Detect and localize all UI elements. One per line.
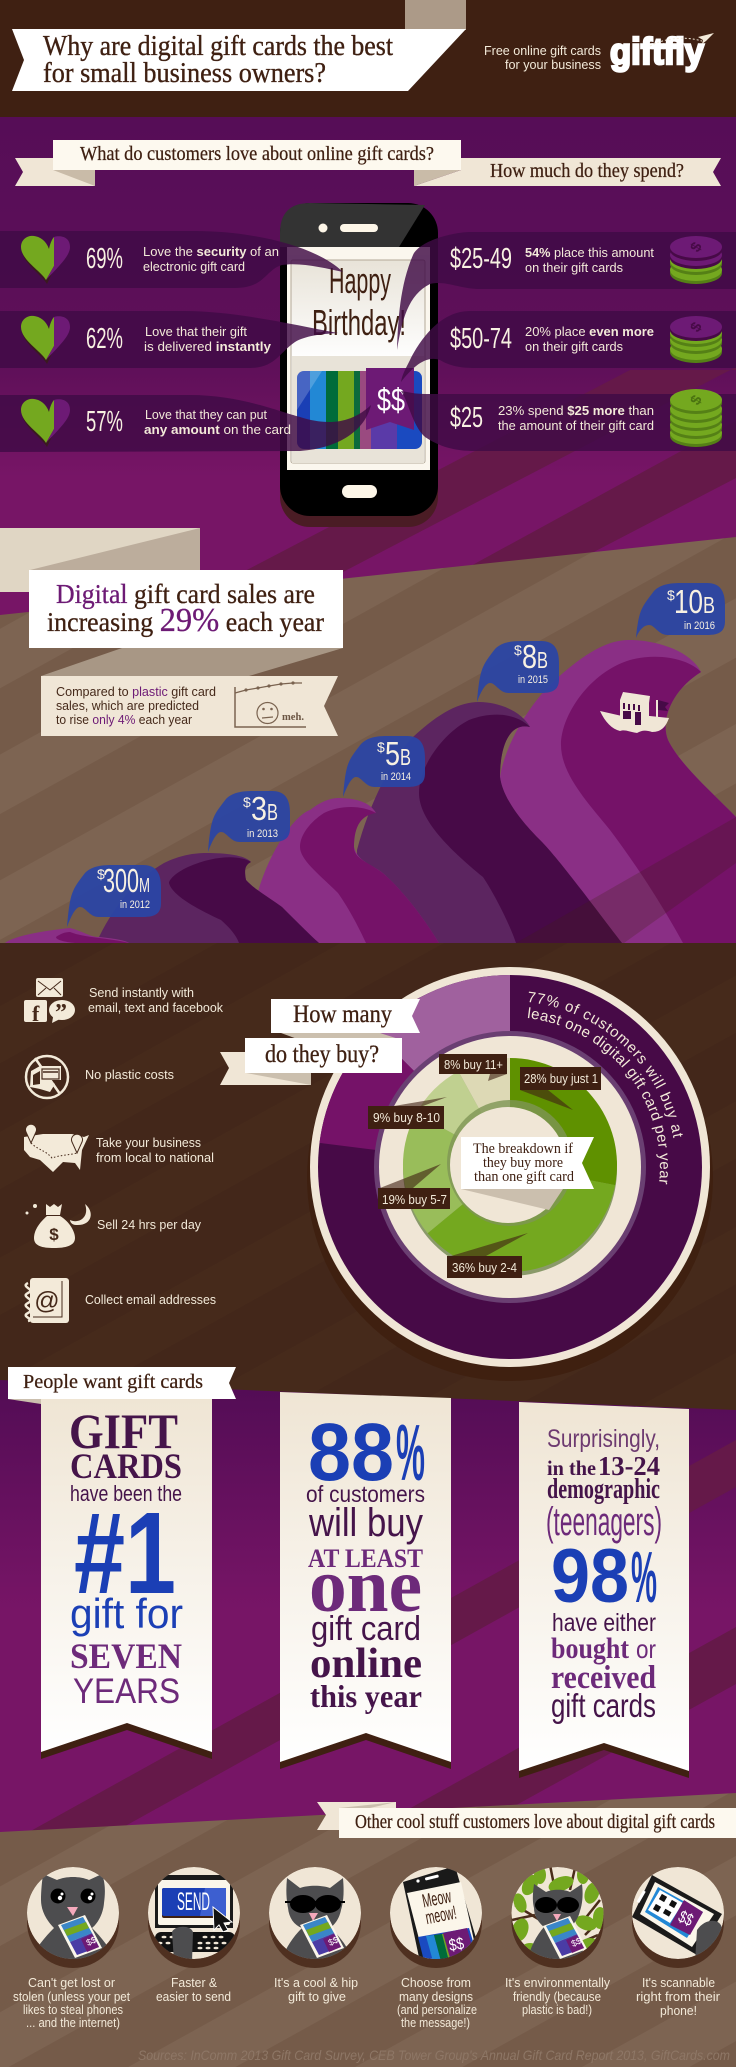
curved heading: least one digital gift card per year [528, 1007, 668, 1184]
icon: money bag at night [26, 1204, 91, 1248]
bubble: 5B in 2014 [343, 735, 425, 797]
tagline: for your business [505, 57, 601, 72]
ribbon heading: how many do they buy: How many [293, 1001, 392, 1028]
segment 36 percent [428, 1165, 615, 1272]
bubble: 8B in 2015: $ [514, 642, 522, 658]
caption 3: It's a cool & hip [274, 1975, 358, 1990]
section ribbons top [15, 140, 721, 186]
spend amounts: $50-74 [450, 323, 512, 355]
coin stacks: $ [687, 319, 706, 335]
green donut shadow [403, 1062, 617, 1276]
label: 19% buy 5-7: 19% buy 5-7 [382, 1192, 447, 1207]
icon: phone with meow message: Meow [421, 1886, 453, 1912]
phone body [280, 203, 438, 516]
waves chart [5, 640, 736, 943]
label: 9% buy 8-10 [368, 1106, 444, 1129]
bubble: 10B in 2016: 10 [674, 583, 703, 620]
icon: store on a boat [600, 692, 669, 733]
coin stacks: $ [687, 239, 706, 255]
segment 8 percent [458, 1058, 510, 1165]
label: 28% buy just 1: 28% buy just 1 [524, 1071, 598, 1086]
caption 3: gift to give [288, 1989, 346, 2004]
caption 4 [397, 1975, 477, 2030]
bubble: 300M in 2012: M [139, 875, 150, 897]
comparison text [56, 684, 216, 727]
phone speaker and camera [318, 224, 378, 232]
sales headline [47, 579, 324, 639]
caption 5 [505, 1975, 610, 2017]
icon: phone with meow message: meow! [424, 1903, 458, 1929]
segment 9 percent [416, 1071, 510, 1165]
donut chart [307, 967, 713, 1381]
bubble: 10B in 2016: $ [667, 587, 675, 603]
header ribbon fold [405, 0, 466, 30]
reasons customers love gift cards: Love that they can put [145, 407, 267, 422]
phone glare [280, 203, 425, 247]
banner 2: 88 percent of customers: AT LEAST [308, 1544, 423, 1573]
banner 2: 88 percent of customers: gift card [311, 1610, 421, 1648]
banner 1: gift cards number one: have been the [70, 1481, 182, 1506]
icon: USA map with pins [24, 1124, 89, 1172]
stat percentages: 69% [86, 243, 123, 275]
ribbon heading: how many do they buy [220, 999, 420, 1085]
outer ring segment medium [320, 1031, 510, 1167]
label: 8% buy 11+ [439, 1054, 507, 1074]
fold below sales box [41, 648, 343, 676]
label tails [380, 1074, 573, 1256]
reasons customers love gift cards: Love the security of an [143, 244, 279, 259]
spend descriptions: 20% place even more [525, 324, 654, 339]
ribbon fold [281, 1033, 402, 1040]
fold behind sales box [0, 528, 200, 592]
hearts [21, 236, 70, 447]
bubble: 10B in 2016 [636, 583, 725, 638]
inner cream disc [379, 1036, 641, 1298]
caption 6: phone! [660, 2003, 697, 2018]
caption 2 [156, 1975, 231, 2004]
greeting text [312, 260, 406, 343]
bubble: 8B in 2015: in 2015 [518, 674, 548, 686]
icon: email, facebook, text [24, 978, 75, 1026]
background: purple banners section [0, 1380, 736, 1840]
bubble: 3B in 2013: 3 [251, 790, 267, 827]
greeting text: Happy [329, 260, 391, 301]
spend descriptions: on their gift cards [525, 260, 623, 275]
bubble: 3B in 2013: in 2013 [247, 828, 278, 840]
wave shade stripe [516, 817, 736, 943]
caption 3 [274, 1975, 358, 2004]
reasons customers love gift cards: Love that their gift [145, 324, 247, 339]
background: taupe footer section [0, 1793, 736, 2067]
title: for small business owners? [43, 58, 326, 89]
hole [450, 1107, 566, 1223]
banner 2: 88 percent of customers: one [309, 1544, 422, 1628]
bubble: 300M in 2012: 300 [103, 862, 139, 899]
banner 3: teenagers 98 percent: 98 [551, 1534, 629, 1619]
label: 9% buy 8-10: 9% buy 8-10 [373, 1110, 440, 1125]
icon: email, facebook, text: f [32, 1001, 40, 1026]
greeting text: Birthday! [312, 302, 406, 343]
title: Why are digital gift cards the best [43, 31, 393, 62]
banner 2: 88 percent of customers: will buy [308, 1501, 423, 1545]
banner 1: gift cards number one: CARDS [70, 1446, 182, 1486]
do they buy [245, 1038, 402, 1073]
caption 6: right from their [636, 1989, 721, 2004]
banner 1: gift cards number one: YEARS [73, 1672, 180, 1711]
caption 5: plastic is bad!) [522, 2002, 592, 2017]
banner 3: teenagers 98 percent [519, 1402, 689, 1778]
banner 2: 88 percent of customers: this year [310, 1678, 422, 1714]
label: 36% buy 2-4: 36% buy 2-4 [452, 1260, 517, 1275]
ribbon: people want gift cards [8, 1367, 236, 1404]
banner 3: teenagers 98 percent: in the [547, 1456, 596, 1480]
icon: cat in tree [512, 1867, 604, 1959]
ribbon: what do customers love [53, 140, 461, 170]
banner 1: gift cards number one: gift for [70, 1590, 183, 1637]
coin stacks: $ [687, 392, 706, 408]
centre label: The breakdown if [473, 1141, 573, 1157]
card ribbon [366, 368, 414, 430]
benefit 3 text: from local to national [96, 1150, 214, 1165]
caption 4: (and personalize [397, 2002, 477, 2017]
benefit 1 text: email, text and facebook [88, 1000, 223, 1015]
donut outer rim [310, 967, 710, 1367]
icon: phone with meow message [390, 1866, 482, 1965]
caption 5: friendly (because [513, 1989, 601, 2004]
bubble: 300M in 2012: in 2012 [120, 899, 150, 911]
caption 6 [636, 1975, 721, 2018]
label: 19% buy 5-7 [378, 1188, 450, 1209]
tagline: Free online gift cards [484, 43, 601, 58]
wave 2013 [90, 853, 319, 943]
outer ring segment light [374, 975, 510, 1167]
spend descriptions [498, 245, 654, 433]
banner 1: gift cards number one [41, 1399, 212, 1759]
background: taupe sales section [0, 537, 736, 945]
caption 1: stolen (unless your pet [13, 1989, 130, 2004]
banner 3: teenagers 98 percent: 13-24 [598, 1451, 660, 1481]
bubble: 3B in 2013: $ [243, 794, 251, 810]
caption 4: Choose from [401, 1975, 471, 1990]
mini flat line chart [235, 681, 306, 727]
comparison ribbon [41, 676, 338, 736]
icon: laptop send button: SEND [177, 1888, 210, 1916]
banner 3: teenagers 98 percent: demographic [547, 1474, 660, 1505]
spend descriptions: on their gift cards [525, 339, 623, 354]
spend amounts: $25-49 [450, 243, 512, 275]
banner 2: 88 percent of customers: online [310, 1641, 422, 1687]
bubble: 3B in 2013: B [267, 799, 278, 825]
ribbon: people want gift cards: People want gift cards [23, 1371, 203, 1393]
segment 28 percent [510, 1058, 617, 1185]
bubble: 3B in 2013 [208, 790, 290, 852]
comparison text: Compared to plastic gift card [56, 684, 216, 699]
caption 6: It's scannable [642, 1975, 715, 1990]
bubble: 5B in 2014: 5 [385, 735, 400, 772]
banner 3: teenagers 98 percent: received [551, 1660, 656, 1696]
sales headline: Digital gift card sales are [56, 579, 315, 609]
benefit 3 text [96, 1135, 214, 1165]
outer ring 77 percent [318, 975, 702, 1359]
how many [271, 999, 420, 1033]
spend amounts: $25 [450, 402, 483, 434]
bubble: 8B in 2015: 8 [522, 638, 537, 675]
background: purple section [0, 117, 736, 617]
comparison text: to rise only 4% each year [56, 712, 193, 727]
benefits list [24, 978, 223, 1323]
bubble: 5B in 2014: B [400, 744, 411, 770]
bubble: 10B in 2016: in 2016 [684, 620, 715, 632]
phone shadow [280, 230, 438, 527]
ribbon: how much do they spend [414, 158, 721, 186]
bubble: 300M in 2012: $ [97, 866, 105, 882]
icon: address book [26, 1278, 69, 1323]
icon: laptop send button [148, 1867, 240, 1962]
gift card [297, 371, 422, 449]
caption 4: the message!) [401, 2015, 470, 2030]
logo: giftfly: giftfly [610, 31, 704, 72]
benefit 5 text: Collect email addresses [85, 1292, 216, 1307]
ribbon tail left [15, 158, 95, 186]
wave 2014 [258, 798, 439, 943]
centre label: they buy more [483, 1155, 563, 1171]
centre label [461, 1137, 594, 1189]
phone screen [287, 247, 430, 470]
bubble: 300M in 2012 [67, 862, 161, 927]
icon: cat with sunglasses [269, 1867, 361, 1962]
stat percentages [86, 243, 123, 438]
ribbon headings [80, 143, 684, 182]
icon: phone with QR code [632, 1867, 724, 1962]
coin stacks [670, 236, 722, 447]
background: purple diagonal stripes [241, 367, 736, 573]
icon: money bag at night: $ [49, 1225, 59, 1244]
circle shadows [27, 1876, 724, 1968]
icon: cat with big eyes [27, 1867, 119, 1962]
label: 28% buy just 1 [520, 1067, 601, 1090]
caption 5: It's environmentally [505, 1975, 610, 1990]
curved heading: 77% of customers will buy at [528, 992, 683, 1138]
icon: email, facebook, text: ” [55, 1000, 67, 1026]
home button [342, 485, 377, 498]
reasons customers love gift cards: electronic gift card [143, 259, 245, 274]
tagline [484, 43, 601, 72]
caption 2: Faster & [171, 1975, 217, 1990]
background: header brown [0, 0, 736, 118]
bubble: 5B in 2014: $ [377, 739, 385, 755]
card ribbon dollars: $$ [377, 382, 405, 418]
icon: phone with meow message: $$ [447, 1934, 466, 1955]
stat percentages: 62% [86, 323, 123, 355]
wave 2016 [500, 640, 736, 943]
banner 3: teenagers 98 percent: bought [551, 1632, 629, 1665]
centre label shadow [461, 1189, 563, 1210]
ribbon bands over the phone [0, 231, 736, 452]
caption 1: Can't get lost or [28, 1975, 116, 1990]
ribbon heading: how many do they buy: do they buy? [265, 1041, 379, 1068]
title banner [12, 29, 466, 91]
banner 3: teenagers 98 percent: or [636, 1634, 656, 1664]
hole ring [447, 1100, 573, 1226]
bubble: 5B in 2014: in 2014 [381, 771, 411, 783]
card lower panel [292, 356, 424, 463]
benefit 2 text: No plastic costs [85, 1067, 174, 1082]
centre label: than one gift card [474, 1169, 574, 1185]
benefit 1 text: Send instantly with [89, 985, 194, 1000]
banner 1: gift cards number one: #1 [74, 1488, 176, 1618]
bubble: 10B in 2016: B [703, 592, 715, 618]
caption 2: easier to send [156, 1989, 231, 2004]
icon: no plastic [26, 1056, 68, 1098]
banner 1: gift cards number one: GIFT [69, 1403, 178, 1459]
banner 3: teenagers 98 percent: % [631, 1538, 657, 1618]
banner 2: 88 percent of customers: % [396, 1408, 425, 1497]
greeting card [291, 260, 425, 463]
label: 8% buy 11+: 8% buy 11+ [444, 1057, 503, 1072]
bubble: 8B in 2015: B [537, 647, 548, 673]
reasons customers love gift cards: is delivered instantly [144, 339, 272, 354]
segment 19 percent [403, 1113, 510, 1233]
banner 2: 88 percent of customers [280, 1392, 451, 1769]
reasons customers love gift cards [143, 244, 291, 437]
stat percentages: 57% [86, 406, 123, 438]
benefit 3 text: Take your business [96, 1135, 201, 1150]
caption 4: many designs [399, 1989, 473, 2004]
icon: phone with QR code: $$ [675, 1907, 697, 1930]
meh label: meh. [282, 711, 304, 723]
background: purple banners stripes [0, 1440, 736, 1875]
caption 1 [13, 1975, 130, 2030]
reasons customers love gift cards: any amount on the card [144, 422, 291, 437]
label: 36% buy 2-4 [447, 1256, 522, 1278]
caption 1: ... and the internet) [26, 2015, 120, 2030]
ribbon headings: How much do they spend? [490, 160, 684, 182]
wave 2012 [5, 928, 129, 943]
bubble: 8B in 2015 [477, 638, 559, 702]
background: brown buying section [0, 943, 736, 1423]
sales headline: increasing 29% each year [47, 602, 324, 639]
icon: address book: @ [34, 1287, 60, 1315]
spend descriptions: 54% place this amount [525, 245, 654, 260]
ring separator [374, 1031, 646, 1303]
banner 3: teenagers 98 percent: gift cards [551, 1687, 656, 1724]
title [43, 31, 393, 89]
donut shadow [307, 975, 713, 1381]
banner 2: 88 percent of customers: 88 [308, 1407, 394, 1498]
header panel [12, 0, 714, 91]
ribbon tail [220, 1052, 311, 1085]
banner 2: 88 percent of customers: of customers [306, 1481, 425, 1507]
spend amounts [450, 243, 512, 434]
caption 1: likes to steal phones [23, 2002, 123, 2017]
sales box [29, 570, 343, 648]
ribbon: other cool stuff [317, 1802, 736, 1838]
banner 3: teenagers 98 percent: Surprisingly, [547, 1425, 660, 1453]
banner 3: teenagers 98 percent: have either [552, 1609, 656, 1637]
phone illustration [280, 203, 438, 527]
captions [13, 1975, 721, 2030]
benefit 1 text [88, 985, 223, 1015]
comparison text: sales, which are predicted [56, 698, 199, 713]
benefit 4 text: Sell 24 hrs per day [97, 1217, 201, 1232]
ribbon headings: What do customers love about online gift cards? [80, 143, 434, 165]
spend descriptions: the amount of their gift card [498, 418, 654, 433]
spend descriptions: 23% spend $25 more than [498, 403, 654, 418]
wave 2015 [357, 702, 622, 943]
banner 1: gift cards number one: SEVEN [70, 1636, 182, 1676]
